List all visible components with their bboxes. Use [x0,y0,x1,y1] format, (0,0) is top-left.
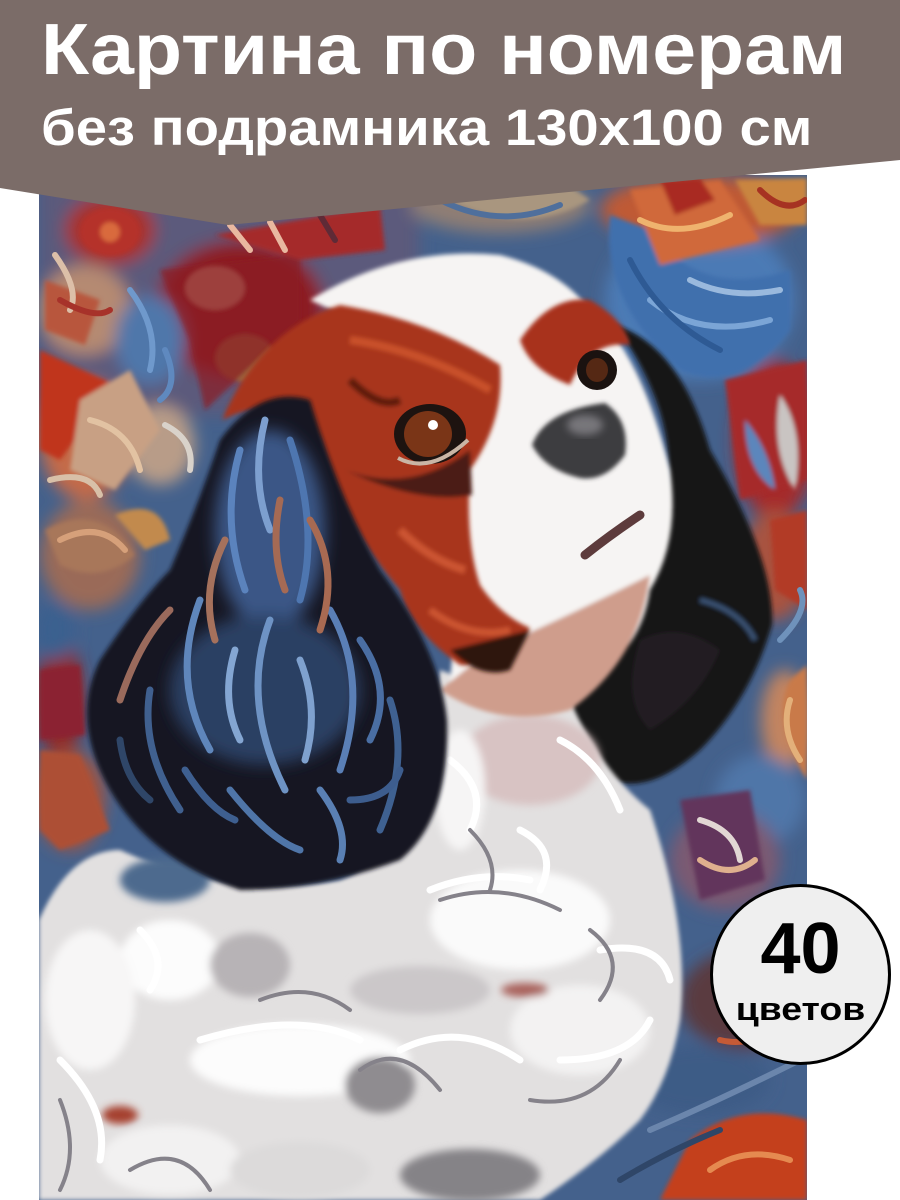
dog: red-brown face patches [222,300,630,672]
floral background [35,175,815,1200]
dog: eyes [394,350,617,464]
badge: 40 colours: цветов [736,991,865,1027]
dog: right ear [566,325,772,784]
painting: spaniel on floral tapestry [39,175,807,1200]
dog: nose and mouth [532,403,640,555]
badge: 40 colours [710,884,891,1065]
dog: left ear [87,397,447,890]
title: Картина по номерам [41,10,846,90]
header banner [0,0,900,225]
dog: head white [310,253,672,717]
subtitle: без подрамника 130х100 см [41,99,812,156]
badge: 40 colours: 40 [760,909,841,989]
dog: chest fur [39,670,682,1200]
